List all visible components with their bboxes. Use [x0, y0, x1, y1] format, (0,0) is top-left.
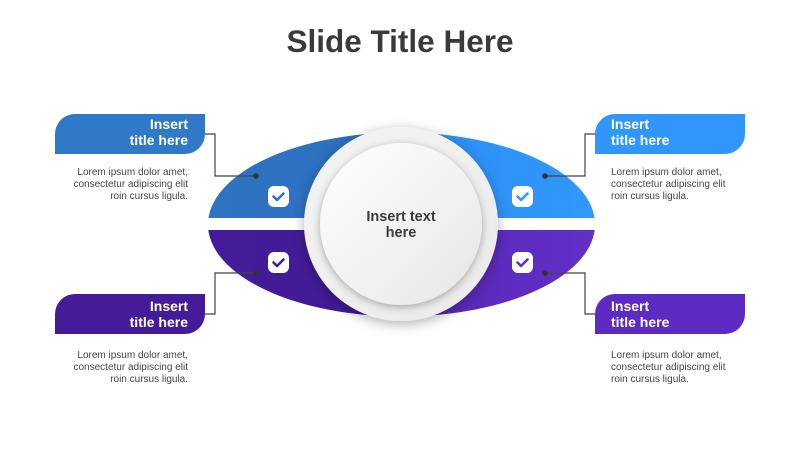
panel: top-right: roin cursus ligula. [611, 191, 689, 202]
icon: check bottom-right [512, 252, 533, 273]
icon: check bottom-left [268, 252, 289, 273]
icon: check top-right [512, 186, 533, 207]
panel: top-left: roin cursus ligula. [110, 191, 188, 202]
panel: bottom-right: Insert [611, 298, 649, 314]
connectors [205, 134, 595, 314]
panel: top-right: Insert [611, 116, 649, 132]
center circle: Insert text [366, 209, 436, 225]
panel: top-left: Lorem ipsum dolor amet, [77, 167, 188, 178]
panel: bottom-right: roin cursus ligula. [611, 374, 689, 385]
panel: top-left: Insert [150, 116, 188, 132]
center circle [304, 127, 498, 321]
panel: bottom-left: Lorem ipsum dolor amet, [77, 350, 188, 361]
panel: bottom-right [595, 294, 745, 385]
ellipse top half [208, 134, 594, 218]
panel: bottom-left: title here [130, 314, 188, 330]
panel: top-left: consectetur adipiscing elit [73, 179, 188, 190]
panel: top-right: consectetur adipiscing elit [611, 179, 726, 190]
panel: top-right: title here [611, 132, 670, 148]
icon: check top-left [268, 186, 289, 207]
panel: top-left [55, 114, 205, 202]
panel: top-left: title here [130, 132, 188, 148]
ellipse bottom half [208, 230, 595, 316]
panel: bottom-right: Lorem ipsum dolor amet, [611, 350, 722, 361]
panel: bottom-left: Insert [150, 298, 188, 314]
title: Slide Title Here [286, 23, 514, 59]
panel: bottom-right: consectetur adipiscing elit [611, 362, 726, 373]
panel: bottom-right: title here [611, 314, 670, 330]
center circle: here [386, 225, 416, 241]
panel: bottom-left: roin cursus ligula. [110, 374, 188, 385]
panel: bottom-left: consectetur adipiscing elit [73, 362, 188, 373]
panel: top-right [595, 114, 745, 202]
panel: top-right: Lorem ipsum dolor amet, [611, 167, 722, 178]
panel: bottom-left [55, 294, 205, 385]
